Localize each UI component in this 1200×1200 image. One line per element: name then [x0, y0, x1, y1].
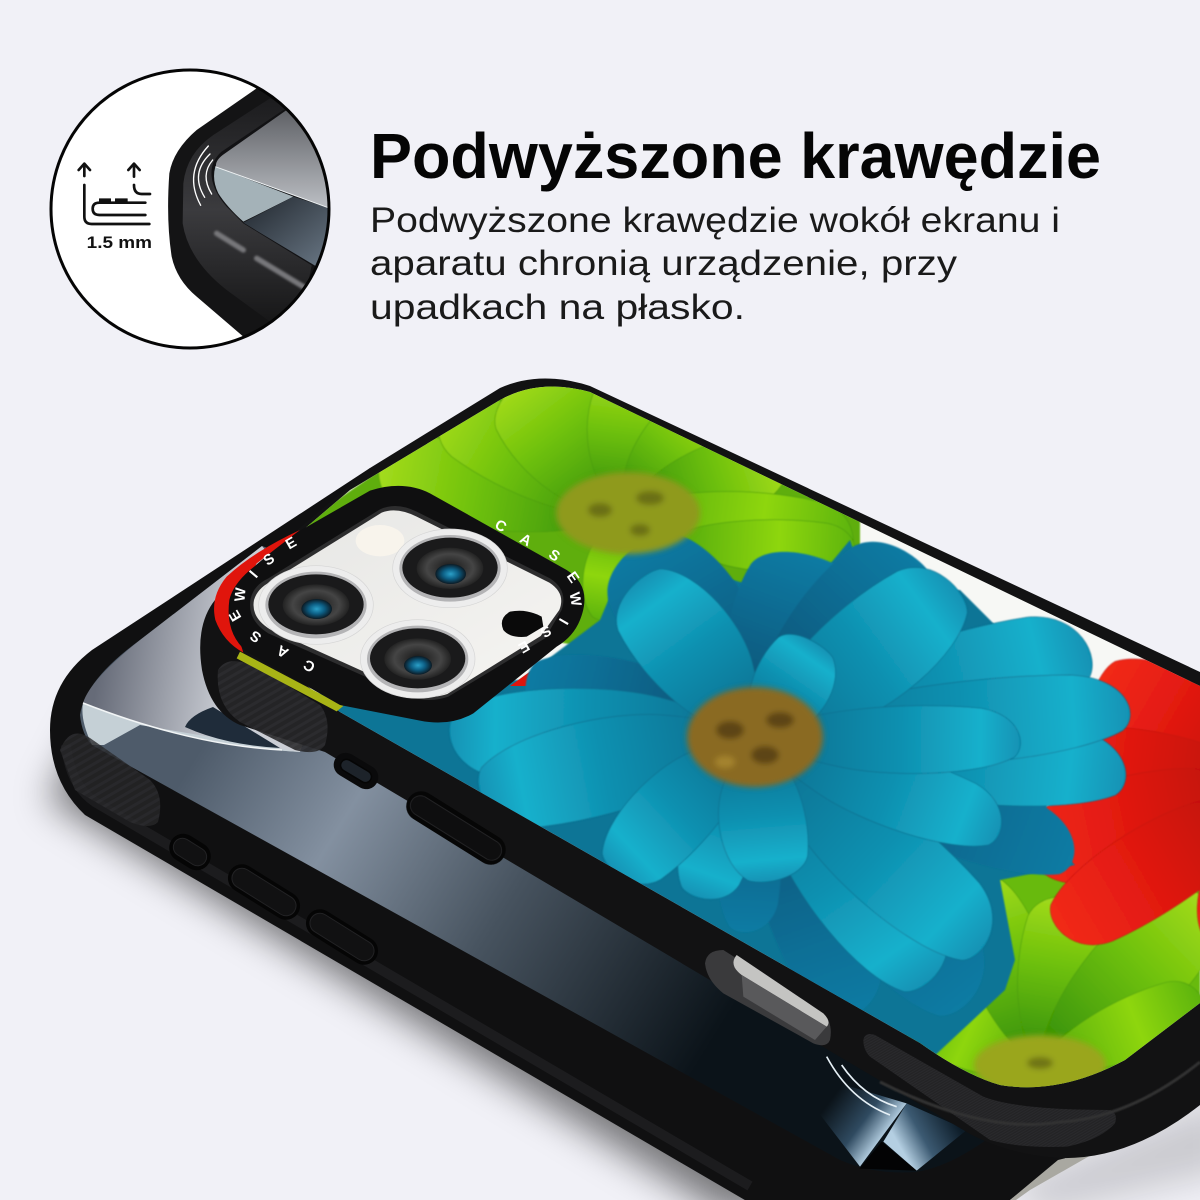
flower centres: [556, 472, 1106, 1095]
rim lettering: A: [274, 641, 292, 660]
rim lettering: C: [301, 655, 318, 675]
small red petal near camera: [510, 671, 530, 686]
front phone ribbed pad: camera side: [218, 661, 328, 752]
camera plate: [254, 510, 561, 697]
rim lettering: S: [545, 547, 563, 566]
rim lettering: [226, 517, 584, 675]
inset phone corner photo: [168, 88, 328, 336]
back phone screen: [80, 546, 1000, 1172]
shadow under phones: [48, 700, 1200, 1200]
sensor cutout: [502, 611, 543, 637]
inset circle: raised edge detail: [51, 70, 340, 360]
rim lettering: S: [261, 551, 278, 569]
back phone ribbed pad: [60, 734, 160, 826]
description text: [370, 201, 1060, 327]
coloured artwork sliver around camera: [214, 530, 300, 653]
back phone volume down button: [301, 904, 383, 970]
camera surround: [214, 486, 584, 723]
front phone case: [200, 378, 1200, 1158]
description text: Podwyższone krawędzie wokół ekranu i: [370, 201, 1060, 240]
flash: [356, 525, 404, 556]
front phone: [200, 344, 1200, 1158]
camera bump opening: [250, 506, 563, 700]
back phone case: [50, 468, 1200, 1200]
side: mute switch: [329, 748, 383, 794]
rim lettering: S: [537, 621, 554, 640]
lens: left: [259, 566, 373, 644]
icon label: 1.5 mm: 1.5 mm: [87, 233, 152, 252]
rim lettering: I: [555, 615, 571, 627]
front phone ribbed pad: bottom corner: [863, 1034, 1116, 1147]
side: power button: [401, 786, 511, 870]
rim lettering: A: [517, 531, 534, 550]
rim lettering: E: [283, 534, 300, 553]
screen wallpaper: lower right: [783, 1057, 967, 1171]
back phone volume up button: [223, 859, 305, 925]
rim lettering: W: [566, 591, 584, 608]
back phone rim highlight: [66, 745, 750, 1186]
back phone silver edge and port: [1010, 1150, 1100, 1200]
rim lettering: C: [492, 517, 509, 536]
top green flower: [306, 386, 862, 645]
heading: Podwyższone krawędzie: [370, 120, 1101, 192]
camera bump rim: [229, 486, 584, 723]
rim lettering: E: [226, 607, 245, 624]
rim lettering: I: [247, 568, 262, 581]
icon: raised lip diagram: [79, 164, 150, 224]
bottom green flower: [906, 873, 1200, 1088]
case artwork: painted flowers: [200, 344, 1200, 1100]
back phone action button: [164, 828, 216, 876]
rim lettering: S: [247, 626, 265, 645]
rim lettering: E: [515, 637, 532, 656]
lens: upper right: [393, 529, 507, 608]
description text: aparatu chronią urządzenie, przy: [370, 244, 958, 283]
rim lettering: W: [232, 587, 250, 602]
blue flower base: [320, 540, 1090, 1060]
lens: lower: [360, 620, 475, 698]
rim lettering: E: [563, 569, 582, 586]
front phone case highlight: [880, 1062, 1200, 1125]
side: charging port: [705, 950, 831, 1045]
red flower: [1044, 658, 1200, 946]
description text: upadkach na płasko.: [370, 288, 745, 327]
screen wallpaper: upper left: [82, 546, 340, 752]
blue flower: [449, 511, 1133, 1040]
back phone: [50, 468, 1200, 1200]
